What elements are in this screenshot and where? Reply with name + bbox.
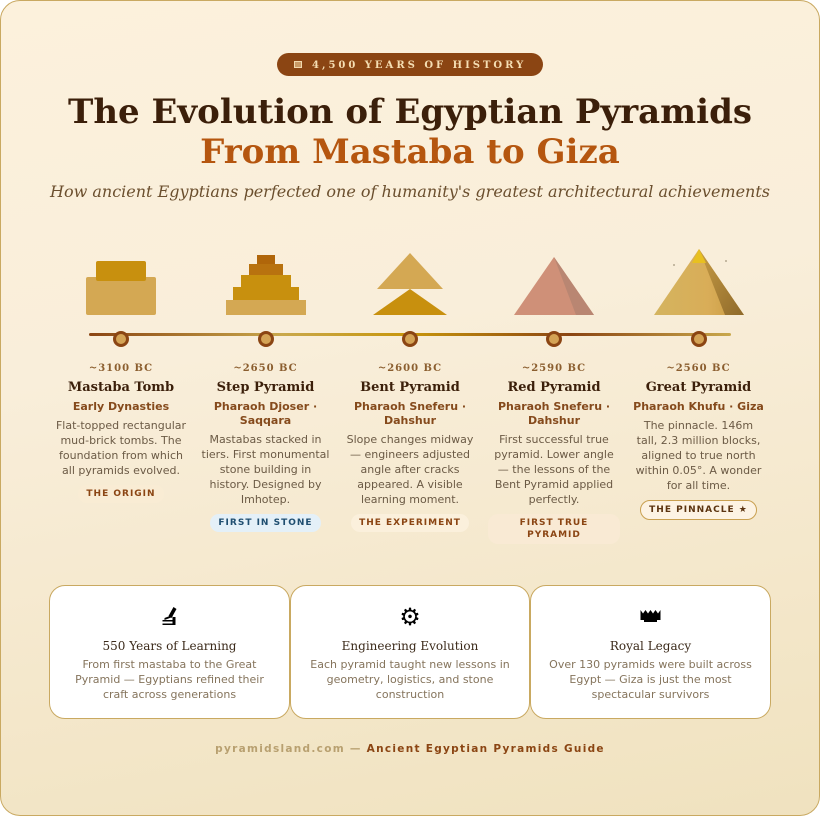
timeline dot 1 [113, 331, 129, 347]
panel: step pyramid: FIRST IN STONE [218, 518, 313, 528]
title: From Mastaba to Giza [200, 132, 620, 172]
panel: step pyramid: Pharaoh Djoser · Saqqara [214, 400, 317, 427]
panel: step pyramid: Step Pyramid [217, 380, 314, 395]
card: 550 years of learning [49, 585, 290, 719]
card text: From first mastaba to the Great Pyramid — Egyptians refined their craft across generations [75, 658, 264, 701]
panel: bent pyramid: Pharaoh Sneferu · Dahshur [354, 400, 466, 427]
panel: bent pyramid: Slope changes midway — engineers adjusted angle after cracks appeared. A visible learning moment. [347, 433, 473, 506]
panel: red pyramid: First successful true pyramid. Lower angle — the lessons of the Bent Pyramid applied perfectly. [494, 433, 614, 506]
badge: years of history [277, 53, 543, 76]
panel: red pyramid: Red Pyramid [507, 380, 601, 395]
panel: great pyramid: Great Pyramid [646, 380, 751, 395]
panel: bent pyramid: Bent Pyramid [360, 380, 460, 395]
panel: step pyramid: ~2650 BC [233, 363, 298, 374]
panel: great pyramid [633, 363, 764, 520]
timeline dot 5 [691, 331, 707, 347]
card: engineering evolution [290, 585, 530, 719]
panel: great pyramid: THE PINNACLE ★ [649, 505, 748, 515]
panel: red pyramid: ~2590 BC [522, 363, 586, 374]
card: royal legacy [530, 585, 771, 719]
footer: pyramidsland.com — Ancient Egyptian Pyramids Guide [215, 743, 605, 755]
card text: Each pyramid taught new lessons in geometry, logistics, and stone construction [310, 658, 510, 701]
timeline dot 3 [402, 331, 418, 347]
panel: mastaba tomb: ~3100 BC [89, 363, 153, 374]
timeline dot 2 [258, 331, 274, 347]
icon: mastaba tomb [86, 261, 156, 315]
panel: mastaba tomb: Early Dynasties [73, 400, 169, 413]
panel: mastaba tomb: Mastaba Tomb [68, 380, 174, 395]
panel: step pyramid: Mastabas stacked in tiers. First monumental stone building in history. Designed by Imhotep. [202, 433, 329, 506]
icon: red pyramid [514, 257, 594, 315]
panel: bent pyramid [347, 363, 473, 532]
panel: mastaba tomb: THE ORIGIN [86, 489, 156, 499]
panel: great pyramid: Pharaoh Khufu · Giza [633, 400, 764, 413]
title [68, 92, 752, 172]
subtitle: How ancient Egyptians perfected one of humanity's greatest architectural achievements [50, 182, 770, 201]
badge: years of history: 4,500 YEARS OF HISTORY [312, 60, 526, 71]
pyramid illustrations [86, 249, 744, 315]
panel: red pyramid [494, 363, 614, 540]
panel: red pyramid: Pharaoh Sneferu · Dahshur [498, 400, 610, 427]
icon: microscope [162, 607, 176, 625]
card heading: Engineering Evolution [342, 639, 478, 653]
title: The Evolution of Egyptian Pyramids [68, 92, 752, 132]
card text: Over 130 pyramids were built across Egypt — Giza is just the most spectacular survivors [549, 658, 752, 701]
panel: step pyramid [202, 363, 329, 532]
panel: mastaba tomb: Flat-topped rectangular mud-brick tombs. The foundation from which all pyramids evolved. [56, 419, 186, 477]
panel: great pyramid: The pinnacle. 146m tall, 2.3 million blocks, aligned to true north within 0.05°. A wonder for all time. [636, 419, 761, 492]
icon: crown [640, 610, 660, 622]
panel: mastaba tomb [56, 363, 186, 499]
timeline dot 4 [546, 331, 562, 347]
icon: great pyramid [654, 249, 744, 315]
panel: bent pyramid: ~2600 BC [378, 363, 442, 374]
panel: bent pyramid: THE EXPERIMENT [359, 518, 461, 528]
panel: great pyramid: ~2560 BC [666, 363, 731, 374]
card heading: 550 Years of Learning [102, 639, 236, 653]
card heading: Royal Legacy [610, 639, 691, 653]
icon: gear: ⚙ [399, 603, 421, 631]
icon: bent pyramid [373, 253, 447, 315]
icon: step pyramid [226, 255, 306, 315]
timeline [89, 333, 731, 336]
panel: red pyramid: FIRST TRUE PYRAMID [520, 518, 588, 540]
